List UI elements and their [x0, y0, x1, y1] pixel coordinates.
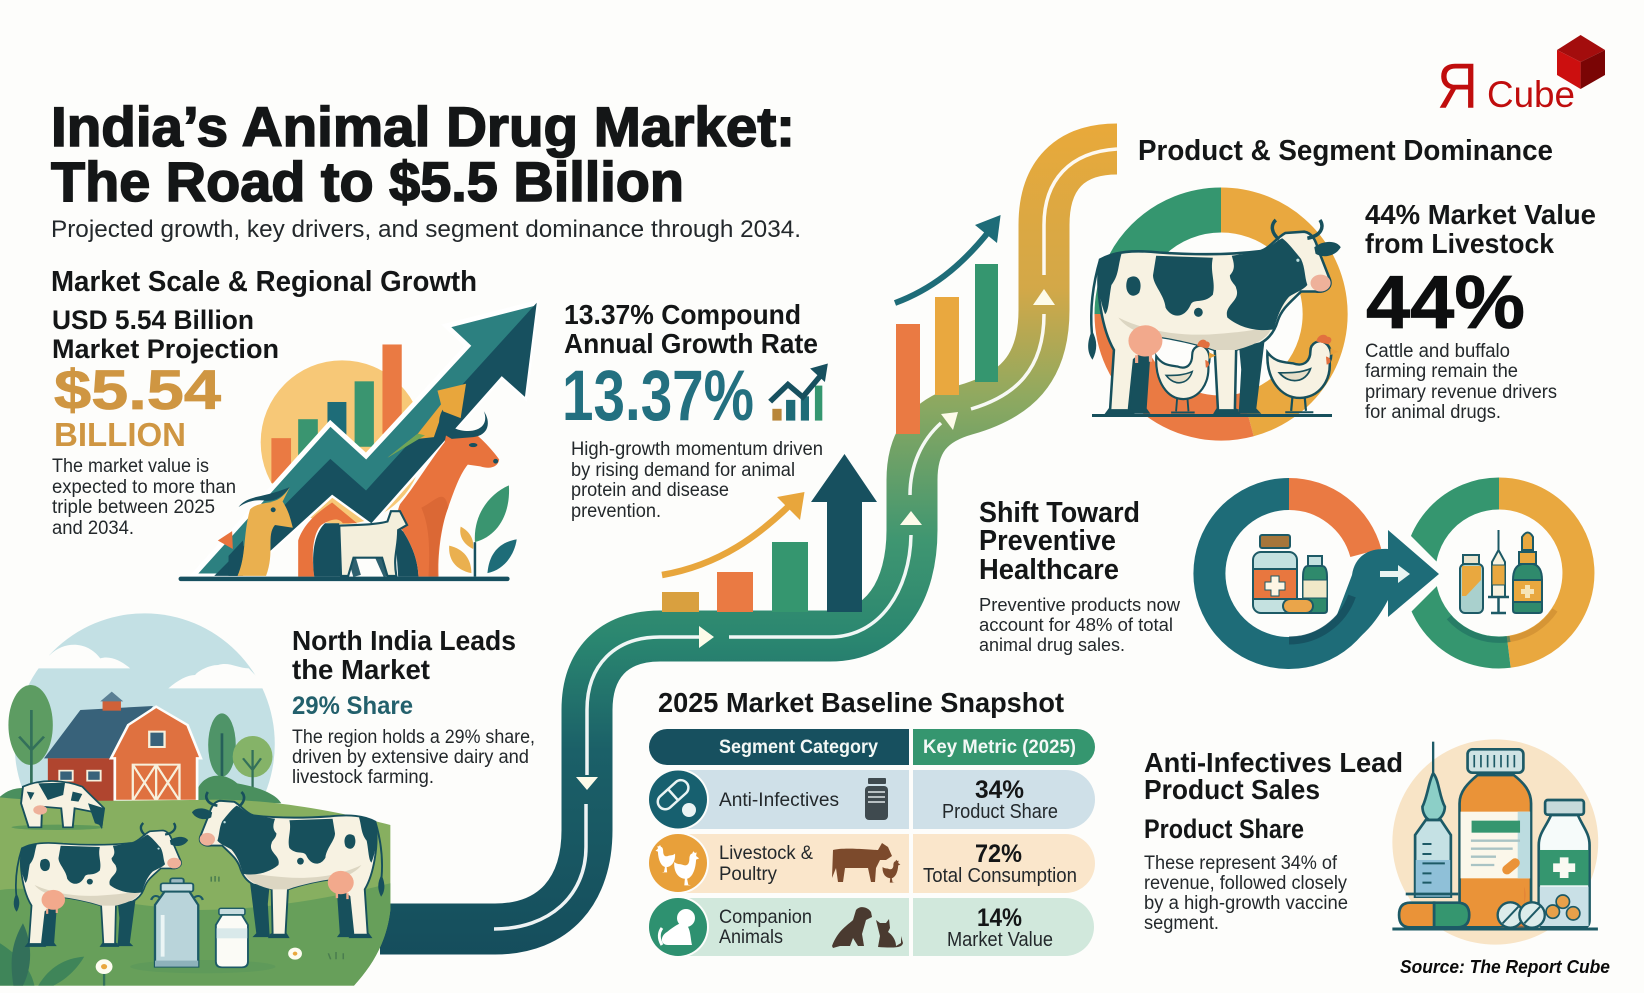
- anti-infectives heading: [1144, 747, 1403, 805]
- preventive text: animal drug sales.: [979, 634, 1125, 655]
- market projection label: USD 5.54 Billion: [52, 305, 254, 335]
- table header: [649, 729, 1095, 765]
- row: livestock and poultry: [647, 832, 1095, 894]
- livestock text: Cattle and buffalo: [1365, 341, 1510, 362]
- title: [51, 95, 795, 213]
- title: India’s Animal Drug Market:: [51, 95, 795, 158]
- CAGR text: prevention.: [571, 501, 661, 522]
- north india text: The region holds a 29% share,: [292, 727, 535, 748]
- table heading: 2025 Market Baseline Snapshot: [658, 687, 1064, 718]
- market projection label: [52, 305, 279, 364]
- preventive heading: Shift Toward: [979, 497, 1140, 529]
- table: baseline snapshot: [647, 729, 1095, 958]
- share value: 29% Share: [292, 692, 413, 720]
- illustration: medicine group: [1392, 739, 1598, 945]
- row: anti-infectives: Anti-Infectives: [719, 789, 839, 811]
- preventive heading: Preventive: [979, 525, 1116, 557]
- CAGR text: High-growth momentum driven: [571, 439, 823, 460]
- north india heading: the Market: [292, 654, 430, 685]
- row: anti-infectives: 34%: [975, 776, 1024, 804]
- anti-infectives heading: Anti-Infectives Lead: [1144, 747, 1403, 778]
- livestock text: [1365, 341, 1557, 423]
- north india heading: [292, 625, 516, 685]
- preventive heading: [979, 497, 1140, 586]
- logo: R Cube: Я: [1437, 50, 1478, 122]
- road ribbon: [380, 149, 1117, 929]
- icon: medicine bottles: [1253, 535, 1327, 613]
- anti-infectives text: [1144, 853, 1348, 934]
- preventive text: account for 48% of total: [979, 614, 1173, 635]
- row: companion animals: Animals: [719, 926, 783, 948]
- north india heading: North India Leads: [292, 625, 516, 656]
- icon: vaccine products: [1460, 530, 1542, 613]
- CAGR value: 13.37%: [562, 357, 754, 436]
- livestock text: farming remain the: [1365, 361, 1518, 382]
- big value $5.54 billion: BILLION: [54, 416, 186, 453]
- CAGR text: protein and disease: [571, 480, 729, 501]
- illustration: growth arrow with livestock: [179, 303, 537, 581]
- row: anti-infectives: [647, 768, 1095, 830]
- heading: market scale: Market Scale & Regional Growth: [51, 266, 477, 298]
- preventive heading: Healthcare: [979, 554, 1119, 586]
- CAGR heading: Annual Growth Rate: [564, 328, 818, 359]
- product share label: Product Share: [1144, 814, 1304, 844]
- market value text: expected to more than: [52, 477, 236, 498]
- table header: Segment Category: [719, 737, 878, 758]
- donut with cow and hens: [1088, 210, 1341, 418]
- farm scene: [0, 613, 390, 986]
- subtitle: Projected growth, key drivers, and segment dominance through 2034.: [51, 216, 801, 243]
- bars: upper growth chart: [895, 215, 1001, 434]
- market value text: The market value is: [52, 456, 209, 477]
- row: companion animals: Companion: [719, 906, 812, 928]
- row: livestock and poultry: 72%: [975, 840, 1022, 868]
- anti-infectives text: segment.: [1144, 913, 1219, 934]
- livestock heading: [1365, 199, 1596, 259]
- icon: small growth chart: [770, 363, 828, 421]
- CAGR heading: 13.37% Compound: [564, 299, 801, 330]
- row: livestock and poultry: Livestock &: [719, 842, 813, 864]
- CAGR text: [571, 439, 823, 522]
- north india text: [292, 727, 535, 788]
- livestock heading: from Livestock: [1365, 228, 1554, 259]
- big value $5.54 billion: [54, 358, 221, 453]
- anti-infectives text: by a high-growth vaccine: [1144, 893, 1348, 914]
- preventive text: Preventive products now: [979, 594, 1181, 615]
- north india text: driven by extensive dairy and: [292, 747, 529, 768]
- market value text: [52, 456, 236, 539]
- row: livestock and poultry: Poultry: [719, 863, 777, 885]
- logo: R Cube: [1437, 35, 1605, 122]
- preventive text: [979, 594, 1181, 655]
- milk can and jar: [130, 878, 276, 973]
- north india text: livestock farming.: [292, 767, 434, 788]
- row: livestock and poultry: Total Consumption: [923, 865, 1077, 887]
- rings: shift to preventive: [1209, 494, 1578, 653]
- source note: Source: The Report Cube: [1400, 957, 1610, 977]
- anti-infectives text: These represent 34% of: [1144, 853, 1338, 874]
- anti-infectives text: revenue, followed closely: [1144, 873, 1347, 894]
- row: companion animals: 14%: [977, 904, 1022, 932]
- CAGR heading: [564, 299, 818, 359]
- market value text: and 2034.: [52, 518, 134, 539]
- row: companion animals: [647, 896, 1094, 958]
- market value text: triple between 2025: [52, 497, 215, 518]
- livestock text: for animal drugs.: [1365, 402, 1501, 423]
- row: companion animals: Market Value: [947, 929, 1053, 951]
- heading: product and segment dominance: Product & Segment Dominance: [1138, 135, 1553, 167]
- cows in foreground: [14, 792, 384, 946]
- row: anti-infectives: Product Share: [942, 801, 1058, 823]
- market projection label: Market Projection: [52, 334, 279, 364]
- livestock text: primary revenue drivers: [1365, 382, 1557, 403]
- bars: lower growth chart: [662, 454, 877, 612]
- table header: Key Metric (2025): [923, 737, 1076, 758]
- big value $5.54 billion: $5.54: [54, 358, 221, 421]
- livestock heading: 44% Market Value: [1365, 199, 1596, 230]
- 44% value: 44%: [1366, 260, 1525, 344]
- anti-infectives heading: Product Sales: [1144, 774, 1320, 805]
- title: The Road to $5.5 Billion: [51, 150, 684, 213]
- CAGR text: by rising demand for animal: [571, 460, 795, 481]
- logo: R Cube: Cube: [1487, 74, 1575, 115]
